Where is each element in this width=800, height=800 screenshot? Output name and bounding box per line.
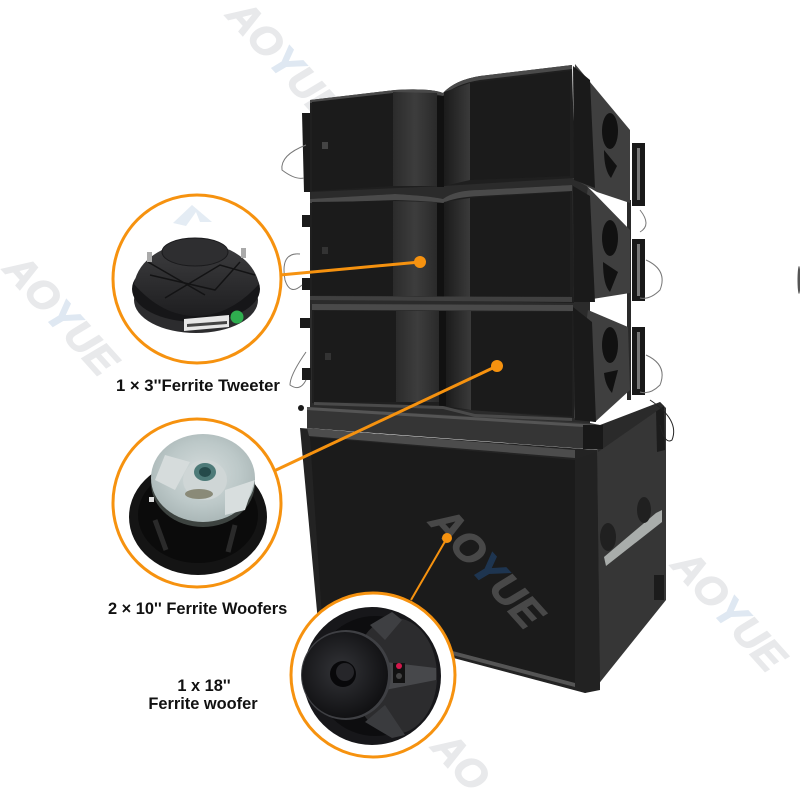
circle frame: subwoofer — [291, 593, 455, 757]
callout: subwoofer driver — [291, 533, 455, 757]
callout: woofers — [113, 360, 503, 587]
watermark fragment — [173, 205, 212, 226]
circle frame: woofers — [113, 419, 281, 587]
bottom line array cabinet — [300, 304, 645, 422]
label: 18 inch woofer — [148, 677, 258, 713]
handle — [604, 510, 662, 566]
leader line: tweeter — [280, 262, 420, 275]
subwoofer cabinet — [300, 402, 666, 693]
marker: subwoofer — [442, 533, 452, 543]
marker: tweeter — [414, 256, 426, 268]
leader line: subwoofer — [411, 538, 447, 600]
rear rigging bar — [627, 200, 631, 400]
label: tweeter: 1 × 3''Ferrite Tweeter — [116, 376, 280, 395]
leader line: woofers — [274, 366, 497, 471]
icon: 18 inch woofer — [301, 607, 441, 745]
callout: tweeter — [113, 195, 426, 363]
watermark: center over subwoofer: AOYUE — [421, 497, 554, 639]
icon: tweeter driver — [132, 238, 260, 333]
top line array cabinet — [302, 64, 645, 206]
cables — [282, 145, 674, 441]
label: woofers: 2 × 10'' Ferrite Woofers — [108, 600, 287, 618]
label: 18 inch woofer: 1 x 18'' — [177, 677, 231, 695]
middle line array cabinet — [302, 185, 645, 303]
icon: 10 inch woofer — [129, 434, 267, 575]
rigging plate — [298, 402, 664, 452]
marker: woofers — [491, 360, 503, 372]
circle frame: tweeter — [113, 195, 281, 363]
label: 18 inch woofer: Ferrite woofer — [148, 695, 258, 713]
watermark: right: AOYUE — [663, 540, 796, 682]
speaker stack — [282, 64, 674, 693]
watermark: bottom: AO — [423, 722, 499, 800]
stack backdrop — [310, 170, 590, 425]
watermark: edge mark — [798, 266, 800, 294]
